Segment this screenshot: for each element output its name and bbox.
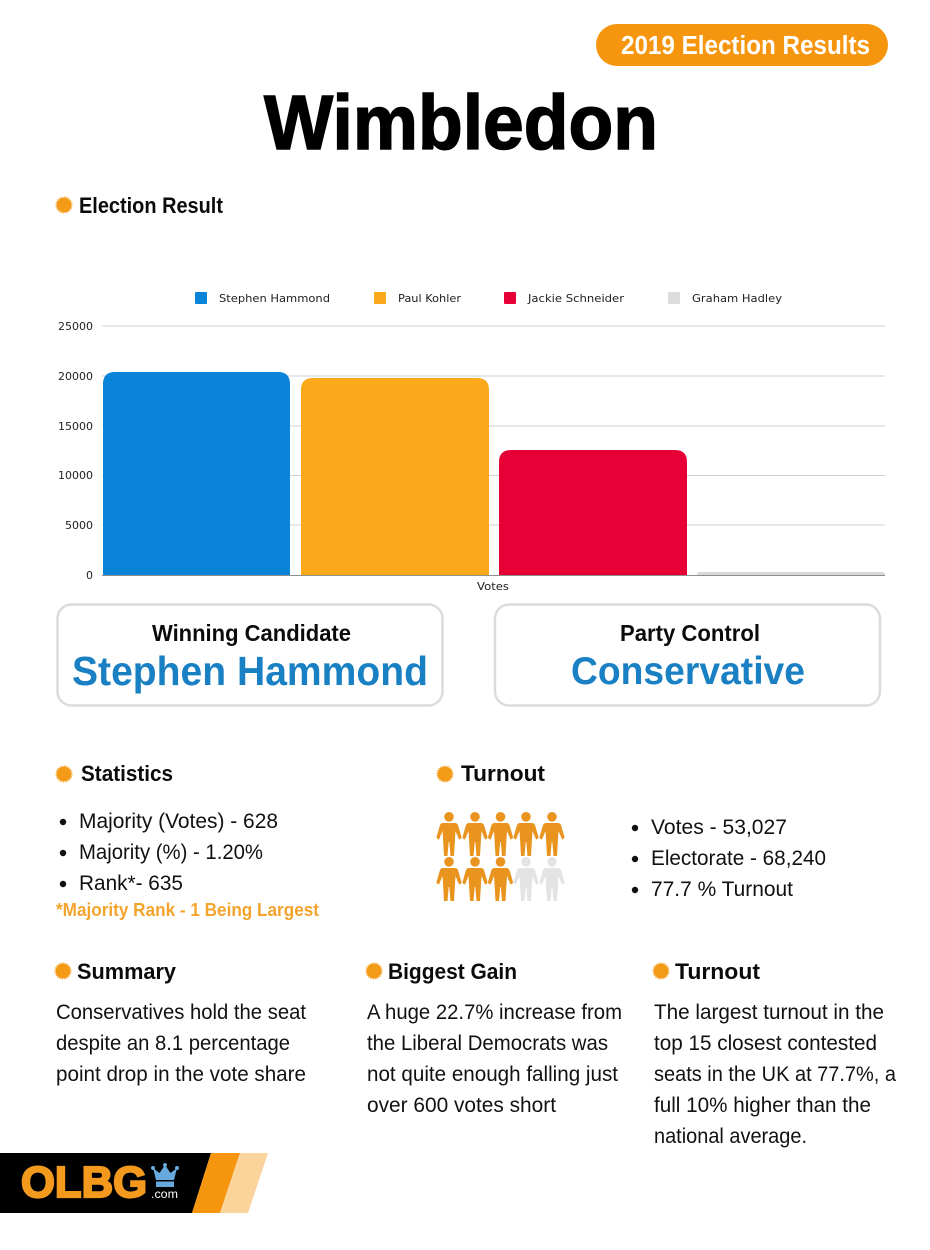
chart legend: Stephen Hammond [219,292,330,305]
bar: Paul Kohler [301,378,489,575]
card: winning candidate: Stephen Hammond [72,648,428,694]
text: turnout commentary [654,1000,896,1148]
bar: Stephen Hammond [103,372,290,575]
x axis label: Votes [477,580,509,593]
statistics list: Rank*- 635 [79,871,183,895]
heading: Statistics: Statistics [81,761,173,786]
text: biggest gain: the Liberal Democrats was [367,1031,608,1055]
text: turnout commentary: The largest turnout in the [654,1000,884,1024]
heading: Turnout commentary: Turnout [675,959,761,984]
bar chart: votes by candidate [58,292,885,593]
card: winning candidate [58,604,442,706]
chart gridlines and y axis: 0 [86,569,93,582]
chart legend: Paul Kohler [398,292,462,305]
chart legend: Graham Hadley [692,292,783,305]
title: Wimbledon [264,80,658,166]
card: party control [495,604,880,706]
badge: 2019 Election Results [596,24,888,66]
bar: Graham Hadley [697,572,885,575]
bar: Jackie Schneider [499,450,687,575]
logo: OLBG.com [0,1153,268,1213]
text: turnout commentary: national average. [654,1124,807,1148]
text: biggest gain [367,1000,622,1117]
statistics list: Majority (%) - 1.20% [79,840,263,864]
text: turnout commentary: top 15 closest contested [654,1031,877,1055]
card: winning candidate: Winning Candidate [152,620,351,646]
text: biggest gain: A huge 22.7% increase from [367,1000,622,1024]
heading: Biggest Gain: Biggest Gain [388,959,517,984]
statistics list: Majority (Votes) - 628 [79,809,278,833]
card: party control: Party Control [620,620,760,646]
turnout list: 77.7 % Turnout [651,877,793,901]
chart gridlines and y axis [58,320,885,582]
text: turnout commentary: seats in the UK at 77.7%, a [654,1062,896,1086]
heading: Election Result: Election Result [79,193,223,218]
logo: OLBG.com: .com [151,1187,178,1201]
heading: Turnout: Turnout [461,761,545,786]
chart gridlines and y axis: 20000 [58,370,93,383]
footnote: majority rank: *Majority Rank - 1 Being Largest [56,900,319,920]
chart gridlines and y axis: 25000 [58,320,93,333]
turnout list: Votes - 53,027 [651,815,787,839]
text: biggest gain: over 600 votes short [367,1093,556,1117]
text: summary [56,1000,306,1086]
card: party control: Conservative [571,650,805,693]
statistics list [60,809,278,895]
chart gridlines and y axis: 15000 [58,420,93,433]
chart legend [195,292,783,305]
turnout list [632,815,826,901]
text: summary: despite an 8.1 percentage [56,1031,290,1055]
icon: crown [151,1163,179,1187]
icon: turnout pictogram, 8 of 10 people coloured [436,812,564,901]
logo: OLBG.com: OLBG [21,1158,147,1207]
text: summary: point drop in the vote share [56,1062,306,1086]
chart gridlines and y axis: 10000 [58,469,93,482]
text: turnout commentary: full 10% higher than the [654,1093,871,1117]
chart legend: Jackie Schneider [527,292,625,305]
badge: 2019 Election Results: 2019 Election Results [621,32,870,60]
text: summary: Conservatives hold the seat [56,1000,306,1024]
heading: Summary: Summary [77,959,176,984]
text: biggest gain: not quite enough falling just [367,1062,618,1086]
chart gridlines and y axis: 5000 [65,519,93,532]
turnout list: Electorate - 68,240 [651,846,826,870]
